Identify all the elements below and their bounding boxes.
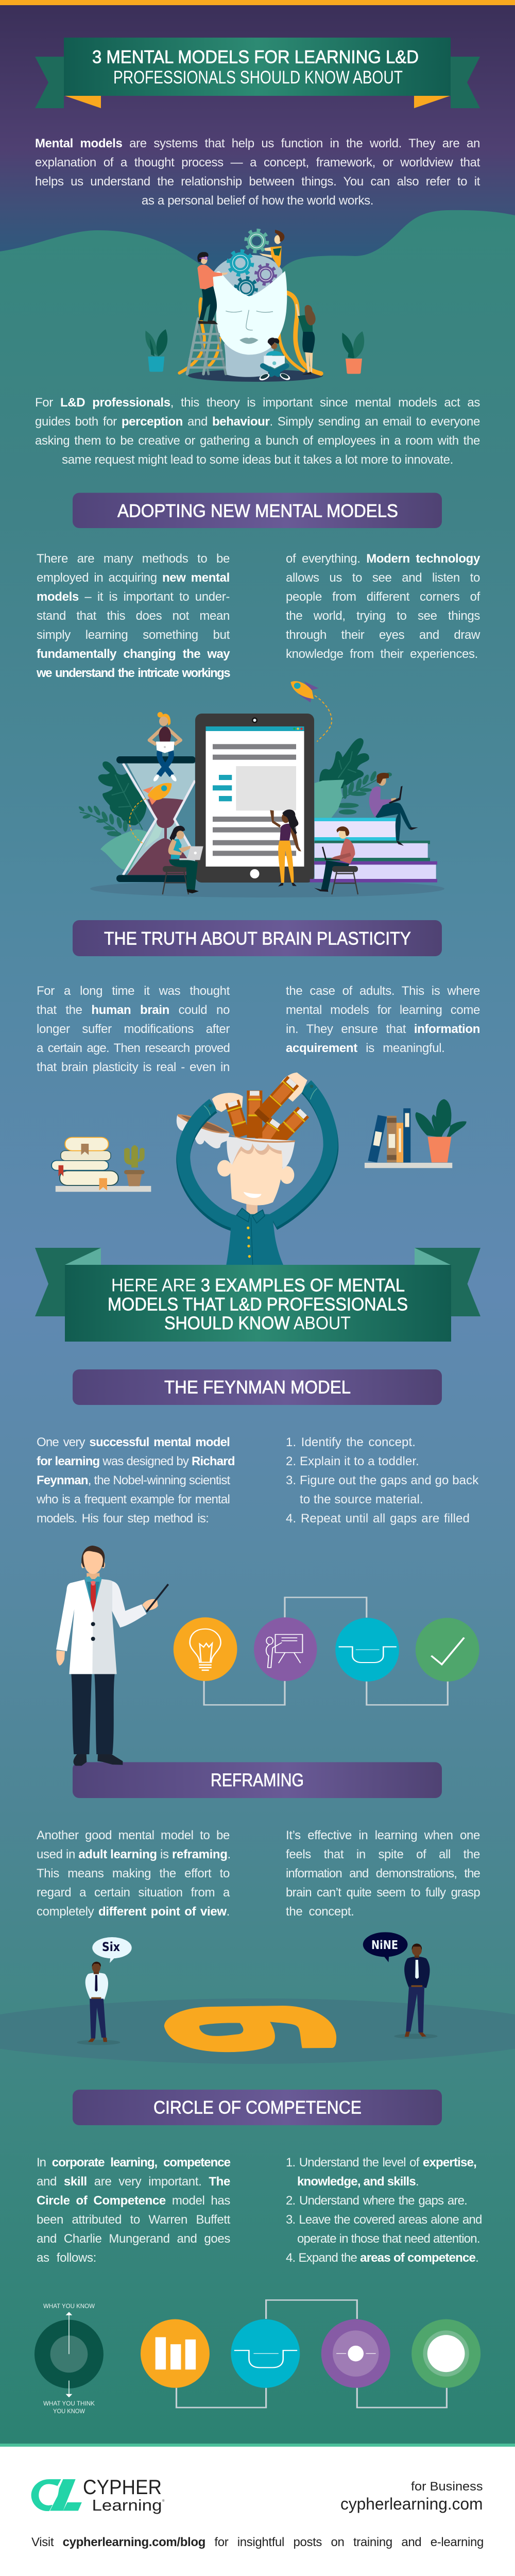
brain plasticity text: left column: a certain age. Then research proved bbox=[37, 1041, 230, 1055]
header: the feynman model bbox=[73, 1369, 442, 1405]
woman with laptop bbox=[258, 337, 291, 382]
ribbon tails bbox=[35, 1248, 480, 1316]
adopting text: right column: through their eyes and draw bbox=[286, 628, 480, 642]
dark leaf bbox=[98, 761, 147, 825]
header: circle of competence bbox=[73, 2090, 442, 2125]
gears bbox=[229, 231, 275, 298]
feynman text: left column: who is a frequent example for mental bbox=[37, 1493, 230, 1506]
illustration: shelf with books and cactus bbox=[52, 1138, 151, 1192]
website block bbox=[340, 2480, 483, 2513]
intro paragraph: as a personal belief of how the world works. bbox=[142, 194, 373, 208]
adopting text: right column: allows us to see and listen to bbox=[286, 571, 480, 585]
tablet bbox=[195, 714, 314, 883]
brain plasticity text: left column: that brain plasticity is real - even in bbox=[37, 1060, 230, 1074]
ribbon tails bbox=[35, 57, 480, 108]
brain plasticity text: right column: in. They ensure that information bbox=[286, 1022, 480, 1036]
man in white shirt bbox=[85, 1962, 108, 2042]
footer bbox=[0, 2444, 515, 2514]
man with gear bbox=[259, 230, 284, 268]
rocket in hourglass bbox=[130, 783, 171, 844]
competence text: left column: been attributed to Warren Buffett bbox=[37, 2213, 230, 2227]
header: reframing bbox=[73, 1762, 442, 1798]
face mask bbox=[213, 271, 287, 354]
orange hair strands bbox=[179, 293, 321, 374]
illustration: tablet and hourglass bbox=[78, 681, 444, 897]
header: adopting new mental models bbox=[73, 493, 442, 528]
feynman text: left column: models. His four step method is: bbox=[37, 1512, 209, 1526]
feynman steps list: 1. Identify the concept. bbox=[286, 1435, 416, 1449]
competence text: left column: and Charlie Mungerand and goes bbox=[37, 2232, 230, 2246]
examples ribbon bbox=[35, 1248, 480, 1342]
feynman steps list: 4. Repeat until all gaps are filled bbox=[286, 1512, 470, 1526]
step: figure out gaps bbox=[335, 1618, 399, 1682]
reframing text: left column: regard a certain situation from a bbox=[37, 1886, 230, 1899]
ribbon text: MODELS THAT L&D PROFESSIONALS bbox=[108, 1294, 408, 1315]
paragraph: L&D professionals: same request might lead to some ideas but it takes a lot more to innovate. bbox=[62, 453, 453, 467]
top accent bar bbox=[0, 0, 515, 5]
shirt bbox=[226, 1208, 283, 1265]
connectors bbox=[204, 1598, 448, 1705]
competence text: left column: and skill are very important. The bbox=[37, 2175, 230, 2189]
logo wordmark: ® bbox=[162, 2499, 165, 2503]
competence text: left column: as follows: bbox=[37, 2251, 96, 2265]
competence steps list: 3. Leave the covered areas alone and bbox=[286, 2213, 482, 2227]
logo wordmark: Learning bbox=[92, 2496, 162, 2514]
ribbon text: HERE ARE 3 EXAMPLES OF MENTAL bbox=[111, 1276, 405, 1295]
reframing text: right column bbox=[286, 1828, 480, 1919]
competence text: left column: Circle of Competence model has bbox=[37, 2194, 230, 2208]
adopting text: left column: models – it is important to under- bbox=[37, 590, 230, 604]
lab coat bbox=[56, 1576, 147, 1674]
adopting text: right column: the world, trying to see things bbox=[286, 609, 480, 623]
ground shadow bbox=[188, 369, 323, 382]
right scene bbox=[270, 738, 437, 894]
title line one: 3 MENTAL MODELS FOR LEARNING L&D bbox=[92, 47, 419, 67]
brain plasticity text: left column: that the human brain could no bbox=[37, 1003, 230, 1017]
hands and pointer bbox=[56, 1599, 158, 1666]
feynman steps list: 2. Explain it to a toddler. bbox=[286, 1454, 419, 1468]
rocket above tablet bbox=[290, 681, 332, 741]
adopting text: left column: simply learning something but bbox=[37, 628, 230, 642]
ladder bbox=[187, 318, 226, 374]
woman standing bbox=[270, 809, 301, 887]
footer visit line: Visit cypherlearning.com/blog for insightful posts on training and e-learning bbox=[31, 2535, 484, 2549]
books bbox=[225, 1076, 309, 1148]
reframing text: right column: brain can’t quite seem to fully grasp bbox=[286, 1886, 480, 1899]
logo wordmark: CYPHER bbox=[83, 2476, 162, 2499]
header: the feynman model: THE FEYNMAN MODEL bbox=[164, 1378, 351, 1397]
reframing text: right column: information and demonstrations, the bbox=[286, 1866, 480, 1880]
man on stool bbox=[314, 826, 358, 894]
ribbon body bbox=[65, 1265, 451, 1342]
background hill bbox=[0, 210, 515, 489]
step: repeat check bbox=[416, 1618, 479, 1682]
step: identify bbox=[174, 1617, 237, 1681]
feynman text: left column: Feynman, the Nobel-winning scientist bbox=[37, 1473, 230, 1487]
reframing text: left column: completely different point of view. bbox=[37, 1904, 230, 1919]
adopting text: left column: employed in acquiring new mental bbox=[37, 571, 230, 585]
step: covered areas bbox=[321, 2319, 390, 2388]
man on books bbox=[369, 773, 418, 846]
left scene bbox=[78, 712, 196, 882]
man on ladder bbox=[197, 252, 228, 324]
diagram labels: WHAT YOU THINK bbox=[43, 2400, 95, 2407]
hair lid bbox=[177, 1114, 230, 1148]
hourglass bbox=[116, 756, 196, 882]
ribbon folds bbox=[65, 1248, 451, 1265]
adopting text: left column: There are many methods to be bbox=[37, 552, 230, 566]
adopting text: right column: of everything. Modern technology bbox=[286, 552, 480, 566]
rotated number on floor bbox=[164, 2006, 336, 2052]
step: gaps bbox=[231, 2319, 300, 2388]
illustration: man taking books from brain bbox=[177, 1073, 331, 1265]
shoes bbox=[74, 1754, 123, 1766]
competence steps list: 2. Understand where the gaps are. bbox=[286, 2194, 467, 2208]
illustration: head with gears bbox=[145, 230, 364, 382]
circle of competence diagram bbox=[35, 2300, 480, 2415]
reframing text: left column: This means making the effort to bbox=[37, 1866, 230, 1880]
book stack bbox=[310, 818, 437, 883]
brain plasticity text: left column: For a long time it was thought bbox=[37, 984, 230, 998]
paragraph: L&D professionals: guides both for perception and behaviour. Simply sending an email to everyone bbox=[35, 415, 480, 429]
ribbon text: SHOULD KNOW ABOUT bbox=[164, 1313, 351, 1333]
step: explain bbox=[254, 1617, 317, 1681]
light leaf bbox=[100, 829, 154, 871]
competence steps list: knowledge, and skills. bbox=[297, 2175, 419, 2189]
title line two: PROFESSIONALS SHOULD KNOW ABOUT bbox=[113, 67, 403, 88]
adopting text: left column bbox=[37, 552, 230, 680]
reframing text: right column: the concept. bbox=[286, 1904, 354, 1919]
header: reframing: REFRAMING bbox=[211, 1770, 304, 1790]
man in dark suit bbox=[404, 1943, 430, 2037]
target circle bbox=[35, 2312, 104, 2397]
connectors bbox=[176, 2300, 447, 2408]
ribbon text bbox=[108, 1276, 408, 1333]
intro paragraph: Mental models are systems that help us function in the world. They are an bbox=[35, 137, 480, 150]
adopting text: right column: knowledge from their experiences. bbox=[286, 647, 478, 661]
reframing text: left column bbox=[37, 1828, 231, 1919]
logo wordmark bbox=[83, 2476, 165, 2514]
brain plasticity text: right column: the case of adults. This is where bbox=[286, 984, 480, 998]
floor shadow bbox=[90, 880, 444, 897]
adopting text: right column: people from different corners of bbox=[286, 590, 480, 604]
reframing text: right column: It’s effective in learning when one bbox=[286, 1828, 480, 1842]
step: level chart bbox=[141, 2319, 210, 2388]
label: nine: NiNE bbox=[371, 1939, 398, 1952]
reframing text: left column: used in adult learning is reframing. bbox=[37, 1848, 231, 1861]
diagram labels: YOU KNOW bbox=[53, 2408, 85, 2415]
brain plasticity text: left column: longer suffer modifications after bbox=[37, 1022, 230, 1036]
brain plasticity text: left column bbox=[37, 984, 230, 1074]
feynman steps list: to the source material. bbox=[300, 1493, 423, 1506]
competence text: left column bbox=[37, 2156, 231, 2265]
competence steps list: 4. Expand the areas of competence. bbox=[286, 2251, 478, 2265]
adopting text: right column bbox=[286, 552, 480, 661]
label: six: Six bbox=[102, 1940, 120, 1954]
ribbon body bbox=[64, 38, 451, 96]
trousers bbox=[71, 1674, 115, 1754]
header: adopting new mental models: ADOPTING NEW MENTAL MODELS bbox=[117, 501, 398, 521]
competence steps list bbox=[286, 2156, 482, 2265]
feynman text: left column: One very successful mental model bbox=[37, 1435, 230, 1449]
speech bubbles bbox=[92, 1937, 132, 1958]
diagram labels bbox=[43, 2302, 95, 2415]
head bbox=[81, 1546, 105, 1579]
header: circle of competence: CIRCLE OF COMPETENCE bbox=[153, 2098, 362, 2117]
brain plasticity text: right column bbox=[286, 984, 480, 1055]
website block: for Business bbox=[411, 2480, 483, 2494]
header: brain plasticity bbox=[73, 920, 442, 956]
floor ellipse bbox=[0, 1998, 515, 2064]
arms bbox=[183, 1086, 331, 1225]
intro paragraph bbox=[35, 137, 480, 208]
brain plasticity text: right column: mental models for learning come bbox=[286, 1003, 480, 1017]
title ribbon bbox=[35, 38, 480, 108]
girl on hourglass bbox=[149, 712, 181, 782]
competence steps list: operate in those that need attention. bbox=[297, 2232, 480, 2246]
intro paragraph: explanation of a thought process — a concept, framework, or worldview that bbox=[35, 156, 480, 170]
adopting text: left column: we understand the intricate workings bbox=[37, 666, 230, 680]
illustration: reframing six and nine bbox=[0, 1932, 515, 2064]
illustration: shelf with binders and plant bbox=[365, 1099, 467, 1168]
right plant bbox=[342, 331, 364, 374]
woman on stool bbox=[163, 826, 203, 894]
adopting text: left column: stand that this does not mean bbox=[37, 609, 230, 623]
head back and neck bbox=[213, 255, 282, 299]
hands bbox=[212, 1073, 307, 1112]
paragraph: L&D professionals bbox=[35, 396, 480, 467]
paragraph: L&D professionals: For L&D professionals, this theory is important since mental models act as bbox=[35, 396, 480, 410]
head and face bbox=[217, 1134, 295, 1215]
brain plasticity text: right column: acquirement is meaningful. bbox=[286, 1041, 445, 1055]
step: expand bbox=[411, 2319, 480, 2388]
diagram labels: WHAT YOU KNOW bbox=[43, 2302, 95, 2310]
fern bbox=[78, 805, 128, 840]
competence steps list: 1. Understand the level of expertise, bbox=[286, 2156, 476, 2170]
feynman step diagram bbox=[174, 1598, 479, 1705]
intro paragraph: helps us understand the relationship between things. You can also refer to it bbox=[35, 175, 480, 189]
plants behind books bbox=[319, 738, 369, 788]
woman standing right bbox=[296, 304, 316, 375]
feynman text: left column bbox=[37, 1435, 235, 1526]
feynman text: left column: for learning was designed by Richard bbox=[37, 1454, 235, 1468]
illustration: scientist with pointer bbox=[56, 1546, 168, 1766]
competence text: left column: In corporate learning, competence bbox=[37, 2156, 230, 2170]
adopting text: left column: fundamentally changing the way bbox=[37, 647, 230, 661]
ribbon folds bbox=[65, 96, 450, 108]
feynman steps list: 3. Figure out the gaps and go back bbox=[286, 1473, 478, 1487]
paragraph: L&D professionals: asking them to be creative or gathering a bunch of employees in a room with the bbox=[35, 434, 480, 448]
reframing text: right column: feels that in spite of all the bbox=[286, 1848, 480, 1861]
header: brain plasticity: THE TRUTH ABOUT BRAIN PLASTICITY bbox=[104, 928, 411, 949]
left plant bbox=[145, 329, 167, 372]
reframing text: left column: Another good mental model to be bbox=[37, 1828, 230, 1842]
feynman steps list bbox=[286, 1435, 479, 1526]
website block: cypherlearning.com bbox=[340, 2495, 483, 2513]
logo mark bbox=[31, 2479, 82, 2511]
